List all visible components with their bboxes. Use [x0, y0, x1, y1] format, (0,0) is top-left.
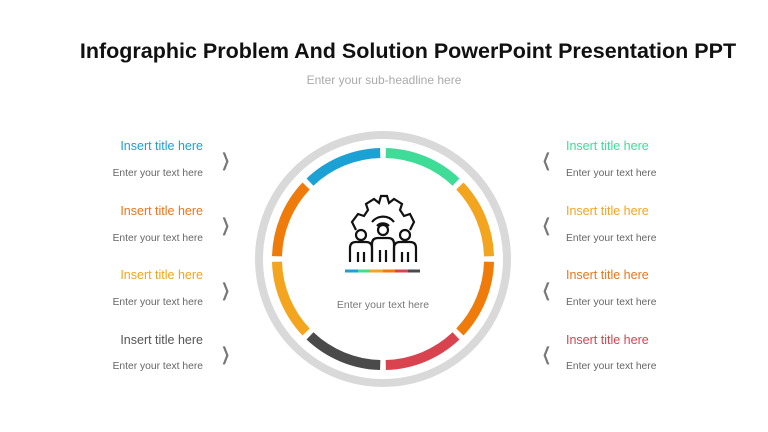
chevron left 2: ❯	[221, 215, 230, 235]
right item 2: Insert title here	[566, 204, 649, 218]
right item 1: Insert title here	[566, 139, 649, 153]
left text 2: Enter your text here	[113, 233, 203, 244]
title: Infographic Problem And Solution PowerPoint Presentation PPT	[80, 39, 736, 63]
chevron left 1: ❯	[221, 150, 230, 170]
subtitle: Enter your sub-headline here	[307, 73, 461, 87]
right text 4: Enter your text here	[566, 361, 656, 372]
colored segments	[277, 153, 489, 365]
chevron left 3: ❯	[221, 280, 230, 300]
right item 3: Insert title here	[566, 268, 649, 282]
right item 4: Insert title here	[566, 333, 649, 347]
outer gray ring	[259, 135, 507, 383]
left text 1: Enter your text here	[113, 168, 203, 179]
chevron left 4: ❯	[221, 344, 230, 364]
left text 3: Enter your text here	[113, 297, 203, 308]
left item 1: Insert title here	[120, 139, 203, 153]
chevron right 2: ❮	[542, 215, 551, 235]
center text: Enter your text here	[337, 299, 429, 311]
right text 1: Enter your text here	[566, 168, 656, 179]
left text 4: Enter your text here	[113, 361, 203, 372]
right text 3: Enter your text here	[566, 297, 656, 308]
icon: team gear	[350, 196, 416, 262]
chevron right 4: ❮	[542, 344, 551, 364]
color bar	[345, 270, 420, 272]
left item 2: Insert title here	[120, 204, 203, 218]
right text 2: Enter your text here	[566, 233, 656, 244]
chevron right 1: ❮	[542, 150, 551, 170]
left item 4: Insert title here	[120, 333, 203, 347]
left item 3: Insert title here	[120, 268, 203, 282]
chevron right 3: ❮	[542, 280, 551, 300]
